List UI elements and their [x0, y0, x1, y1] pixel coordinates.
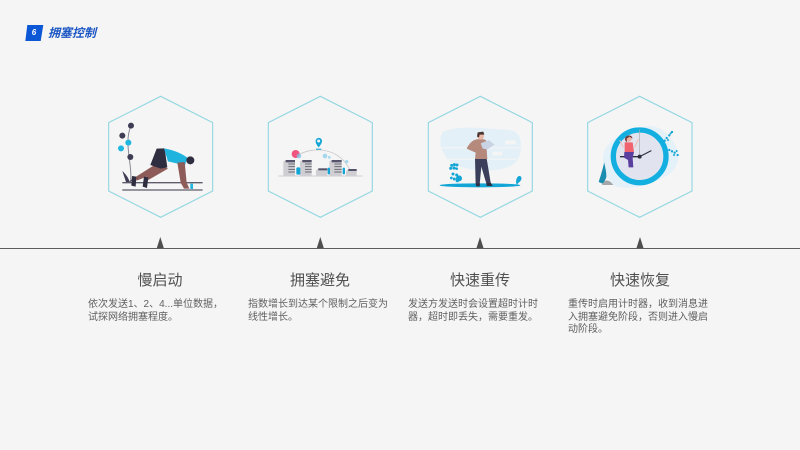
- text: fast recovery description: 入拥塞避免阶段，否则进入慢启: [568, 308, 708, 322]
- text: fast recovery description: [568, 295, 708, 335]
- text: congestion avoidance description: [248, 298, 388, 322]
- text: slow start description: 试探网络拥塞程度。: [88, 312, 178, 322]
- text: congestion avoidance description: 线性增长。: [248, 312, 298, 322]
- heading: slow start: 慢启动: [137, 272, 182, 289]
- text: fast recovery description: 动阶段。: [568, 324, 608, 335]
- title: 拥塞控制: [48, 26, 96, 40]
- text: slow start description: [88, 295, 223, 322]
- text: congestion avoidance description: 指数增长到达某个限制之后变为: [248, 299, 388, 310]
- panel: slow start hexagon illustration: [109, 96, 213, 217]
- text: fast recovery description: 重传时启用计时器，收到消息进: [568, 295, 708, 310]
- heading: congestion avoidance: 拥塞避免: [290, 272, 350, 289]
- panel: fast recovery hexagon illustration: [588, 96, 692, 217]
- text: fast retransmit description: [408, 298, 538, 322]
- section number badge shape: [25, 25, 43, 41]
- heading: fast retransmit: 快速重传: [450, 272, 510, 289]
- text: fast retransmit description: 器，超时即丢失，需要重发。: [408, 308, 538, 322]
- panel: congestion avoidance hexagon illustration: [268, 96, 372, 217]
- panel: fast retransmit hexagon illustration: [428, 96, 532, 217]
- text: slow start description: 依次发送1、2、4...单位数据，: [88, 295, 223, 310]
- text: fast retransmit description: 发送方发送时会设置超时计时: [408, 299, 538, 310]
- section number: 6: [32, 28, 36, 37]
- heading: fast recovery: 快速恢复: [610, 272, 670, 289]
- timeline axis: [0, 237, 800, 249]
